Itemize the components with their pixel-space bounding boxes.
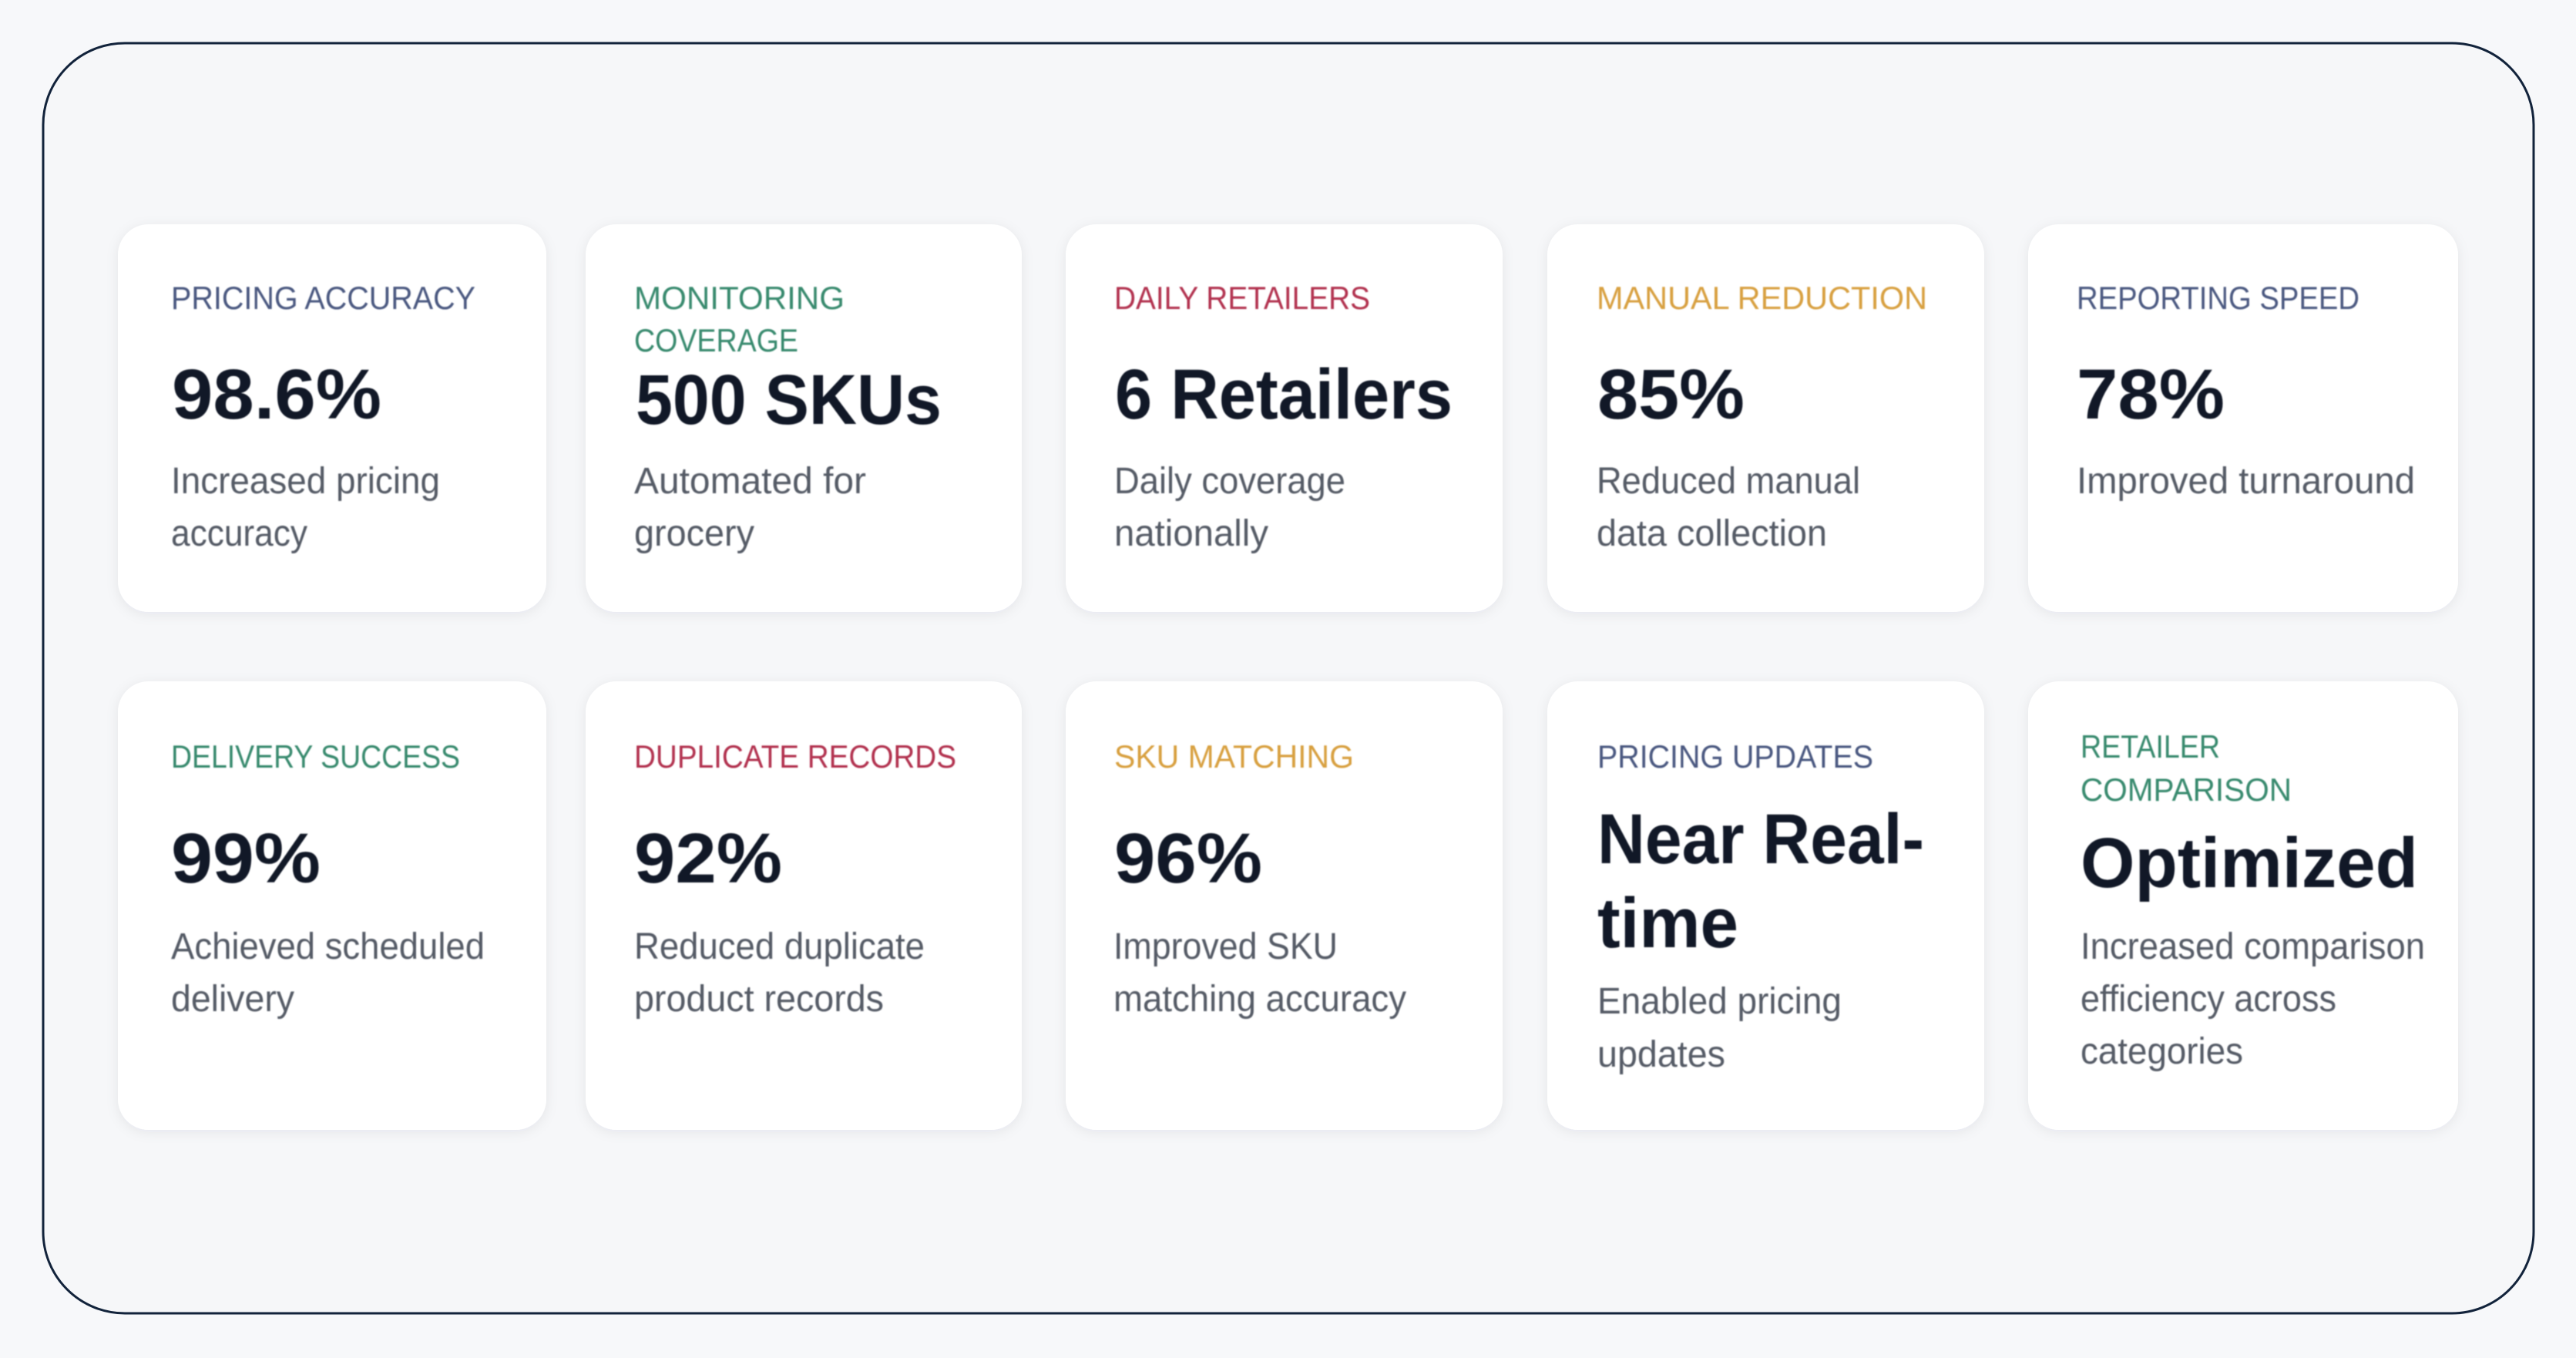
card: sku matching: matching accuracy (1113, 979, 1406, 1020)
card: sku matching: Improved SKU (1113, 926, 1338, 967)
card: duplicate records: Reduced duplicate (634, 926, 925, 967)
card: retailer comparison: Increased comparison (2081, 926, 2425, 967)
card: manual reduction: Reduced manual (1597, 461, 1860, 502)
card: manual reduction (1547, 224, 1984, 612)
card: daily retailers: nationally (1114, 513, 1268, 554)
card: reporting speed: 78% (2077, 355, 2225, 434)
card: reporting speed (2028, 224, 2458, 612)
card: delivery success (118, 681, 546, 1130)
card: retailer comparison: categories (2081, 1031, 2243, 1072)
card: reporting speed: REPORTING SPEED (2077, 280, 2359, 316)
card: monitoring coverage: grocery (634, 513, 754, 554)
card: manual reduction: data collection (1597, 513, 1827, 554)
card: daily retailers (1066, 224, 1503, 612)
card: delivery success: DELIVERY SUCCESS (171, 738, 460, 775)
card: retailer comparison: RETAILER (2081, 728, 2220, 765)
card: daily retailers: 6 Retailers (1115, 355, 1453, 434)
card: reporting speed: Improved turnaround (2077, 461, 2415, 502)
card: duplicate records: product records (634, 979, 884, 1020)
card: duplicate records: DUPLICATE RECORDS (634, 738, 956, 775)
card: monitoring coverage: 500 SKUs (636, 361, 942, 439)
card: retailer comparison: Optimized (2081, 824, 2418, 903)
card: sku matching: 96% (1114, 819, 1262, 898)
card: pricing updates: updates (1597, 1034, 1725, 1075)
card: daily retailers: DAILY RETAILERS (1114, 280, 1370, 316)
card: pricing updates: PRICING UPDATES (1597, 738, 1873, 775)
card: daily retailers: Daily coverage (1114, 461, 1345, 502)
card: pricing accuracy: accuracy (171, 513, 307, 554)
card: duplicate records (586, 681, 1022, 1130)
card: pricing accuracy (118, 224, 546, 612)
card: monitoring coverage: COVERAGE (634, 322, 798, 358)
card: delivery success: delivery (171, 979, 294, 1020)
card: pricing updates: Enabled pricing (1597, 981, 1842, 1022)
card: monitoring coverage (586, 224, 1022, 612)
card: manual reduction: 85% (1597, 355, 1745, 434)
card: retailer comparison: efficiency across (2081, 979, 2336, 1020)
card: pricing accuracy: Increased pricing (171, 461, 440, 502)
card: pricing updates: time (1597, 884, 1738, 963)
card: sku matching (1066, 681, 1503, 1130)
card: pricing accuracy: PRICING ACCURACY (171, 280, 475, 316)
card: monitoring coverage: MONITORING (634, 280, 845, 316)
card: pricing updates (1547, 681, 1984, 1130)
card: monitoring coverage: Automated for (634, 461, 866, 502)
card: pricing updates: Near Real- (1597, 800, 1924, 879)
card: retailer comparison: COMPARISON (2081, 771, 2292, 808)
card: retailer comparison (2028, 681, 2458, 1130)
card: delivery success: 99% (171, 819, 321, 898)
card: sku matching: SKU MATCHING (1114, 738, 1354, 775)
card: pricing accuracy: 98.6% (172, 355, 381, 434)
card: duplicate records: 92% (634, 819, 782, 898)
card: manual reduction: MANUAL REDUCTION (1597, 280, 1927, 316)
card: delivery success: Achieved scheduled (171, 926, 485, 967)
